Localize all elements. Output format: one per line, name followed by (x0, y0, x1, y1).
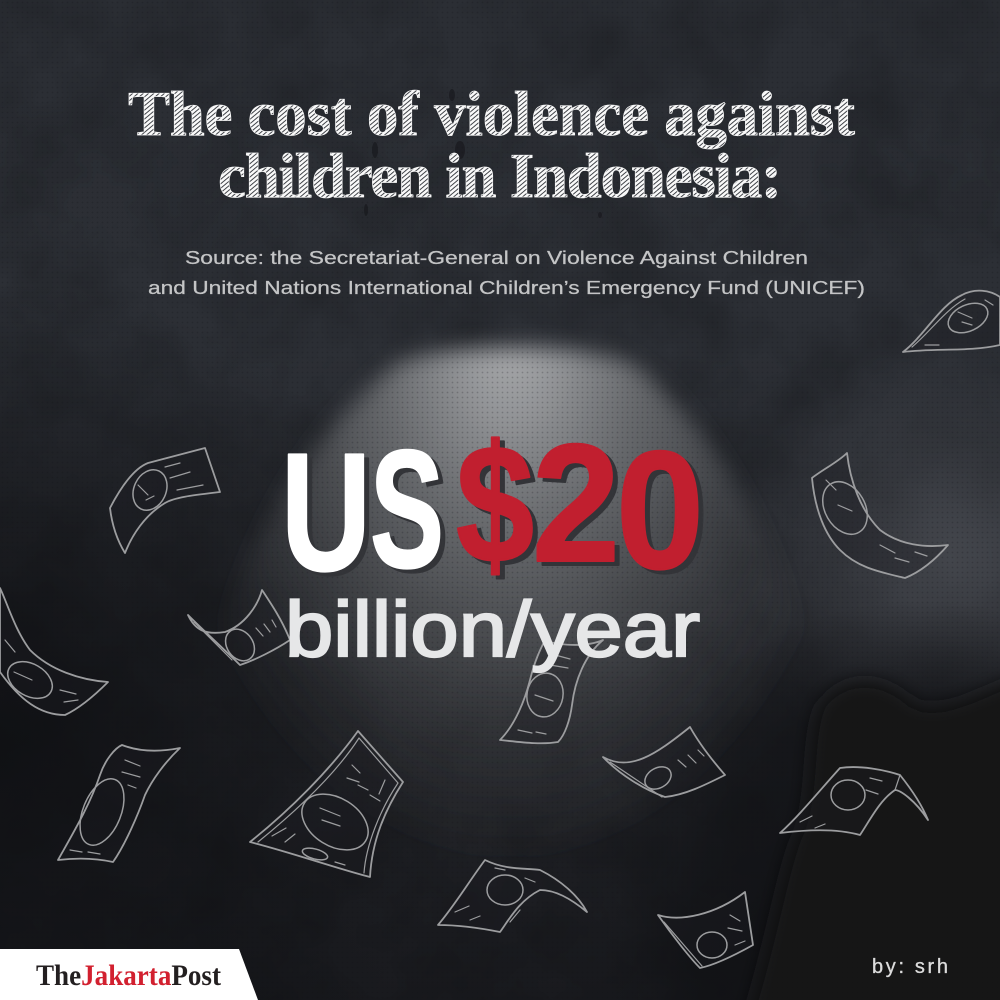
bill: lower right (780, 767, 928, 835)
logo: The Jakarta Post: TheJakartaPost (36, 959, 221, 992)
bill: bottom center (438, 860, 587, 932)
$20: 2 (532, 409, 620, 597)
credit: by: srh (872, 956, 948, 978)
headline figure: US$20 (281, 409, 709, 610)
title: The cost of violence against (128, 79, 855, 149)
bill: bottom right (658, 892, 753, 968)
bill: lower left (58, 745, 180, 862)
US: S (370, 415, 444, 603)
source text: and United Nations International Children’s Emergency Fund (UNICEF) (148, 278, 865, 298)
$20 (456, 409, 704, 604)
headline shadow: U (286, 422, 376, 610)
bill: large (250, 731, 403, 877)
subheading: billion/year: billion/year (285, 585, 700, 673)
bill: behind billion (188, 590, 290, 666)
bill: lower center (603, 727, 725, 797)
bill: center (500, 640, 603, 743)
money bills (0, 291, 1000, 968)
title: children in Indonesia: (218, 141, 782, 211)
headline shadow: $ (461, 414, 539, 602)
$20: $ (456, 410, 534, 598)
bill: left edge (0, 588, 108, 715)
headline shadow: 2 (537, 413, 625, 601)
source text: Source: the Secretariat-General on Violence Against Children (185, 248, 808, 268)
logo: The Jakarta Post (0, 949, 258, 1000)
headline shadow: S (375, 419, 449, 607)
bill: right (812, 453, 948, 578)
$20: 0 (616, 416, 704, 604)
headline shadow: 0 (621, 420, 709, 608)
title (128, 79, 855, 211)
US: U (281, 418, 371, 606)
bill: top right (903, 291, 1000, 352)
source text (148, 248, 865, 298)
headline shadow (286, 413, 709, 610)
bill: upper left (110, 448, 220, 553)
